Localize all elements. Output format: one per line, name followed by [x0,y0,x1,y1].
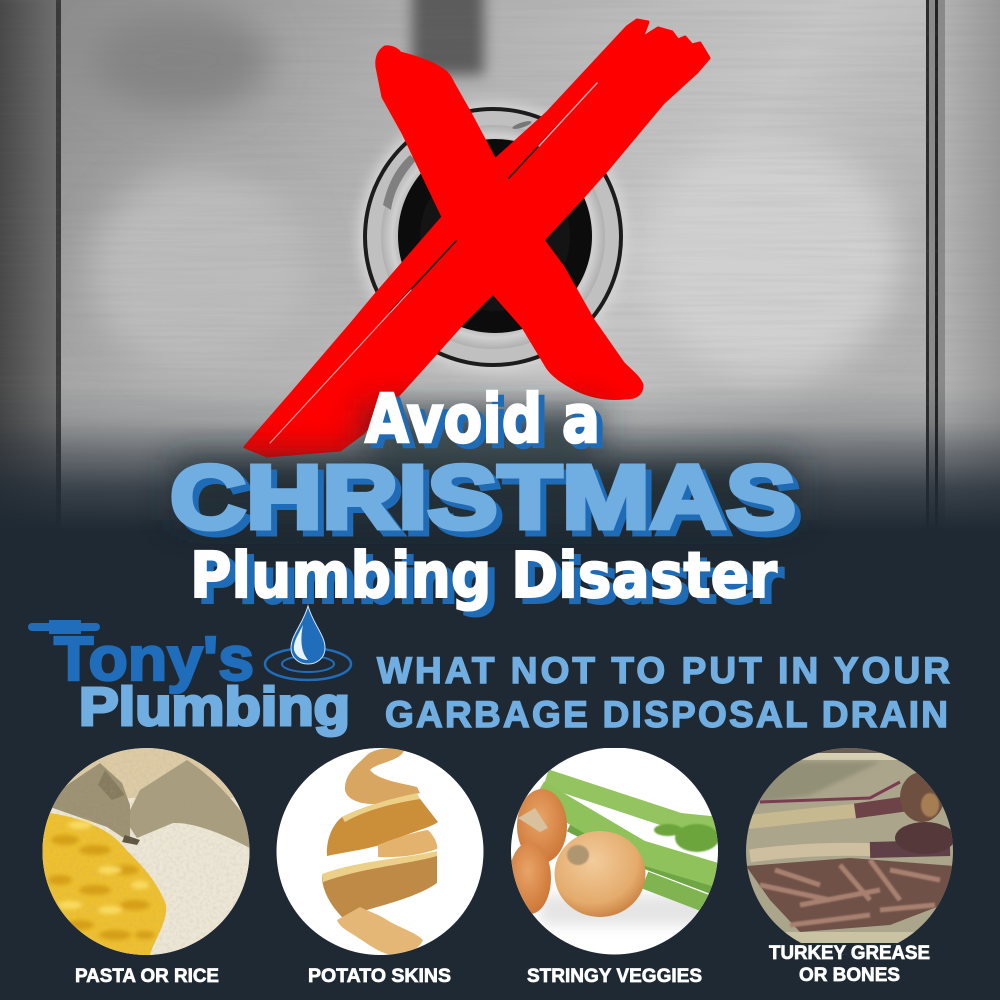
panel: potato skins [276,748,484,987]
panel: stringy veggies [509,748,720,987]
label: stringy veggies: STRINGY VEGGIES [527,966,702,987]
label: turkey grease or bones: OR BONES [799,965,900,986]
title: Plumbing Disaster: Plumbing Disaster [190,539,777,612]
logo: Tony's Plumbing [28,606,351,737]
label: turkey grease or bones [769,943,930,986]
title: CHRISTMAS: CHRISTMAS [176,454,802,554]
title: Avoid a: Avoid a [365,380,600,458]
brush gaps in X [270,83,597,443]
label: turkey grease or bones: TURKEY GREASE [769,943,930,964]
label: pasta or rice: PASTA OR RICE [75,966,219,987]
panel: pasta or rice [42,748,250,987]
dark glow behind headline [175,410,795,520]
icon: water drop with ripples [265,606,351,680]
subheading: what not to put: GARBAGE DISPOSAL DRAIN [385,694,948,735]
title: Avoid a: Avoid a [371,385,606,463]
logo word: Plumbing: Plumbing [79,677,350,737]
background: stainless steel sink [0,0,1000,530]
photo: turkey bones [746,748,955,958]
title: Plumbing Disaster: Plumbing Disaster [197,545,784,618]
photo: pasta and rice in sacks [42,748,250,958]
logo word: Tony's: Tony's [54,625,254,694]
label: potato skins: POTATO SKINS [308,966,451,987]
background: dark fade to navy [0,385,1000,531]
drain [359,103,627,371]
photo: potato peel spiral [276,748,484,956]
title: CHRISTMAS: CHRISTMAS [170,448,796,548]
icon: red X mark [245,20,709,456]
panel: turkey grease or bones [746,748,955,986]
logo pipe icon [28,620,100,634]
subheading: what not to put [377,650,950,735]
photo: onions and celery [509,748,720,956]
subheading: what not to put: WHAT NOT TO PUT IN YOUR [377,650,950,691]
